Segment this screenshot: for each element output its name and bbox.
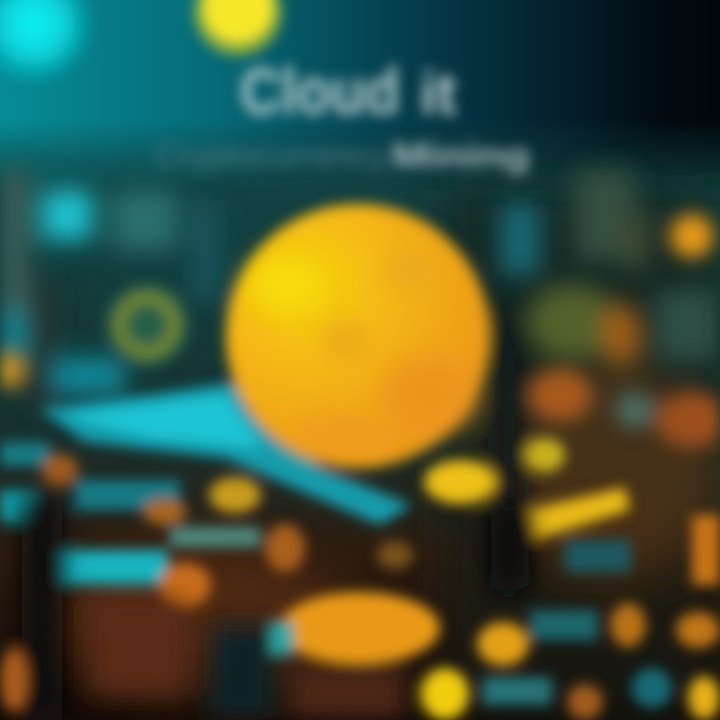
central gold coin [225,203,491,469]
title: Cloud [240,54,400,128]
gold stacks, centre and right [42,438,720,607]
foreground dark pillars [22,495,528,720]
blurred skyline of data towers [0,170,720,590]
title: it [420,60,457,127]
subtitle: Mining [392,137,530,175]
icon: right green coin [526,284,642,367]
foreground gold coin pile [0,592,720,720]
small yellow sun [194,0,282,56]
stacked cyan steps, left [0,442,260,584]
cyan slab beneath the coin [42,383,412,525]
small orange glow markers, right [0,214,720,448]
icon: left green coin [105,283,189,367]
warm brown lower field [90,600,405,720]
subtitle [155,137,530,175]
foreground teal blocks [270,610,672,708]
glowing cyan orb [0,0,94,84]
subtitle: Cryptocurrency [155,137,387,173]
